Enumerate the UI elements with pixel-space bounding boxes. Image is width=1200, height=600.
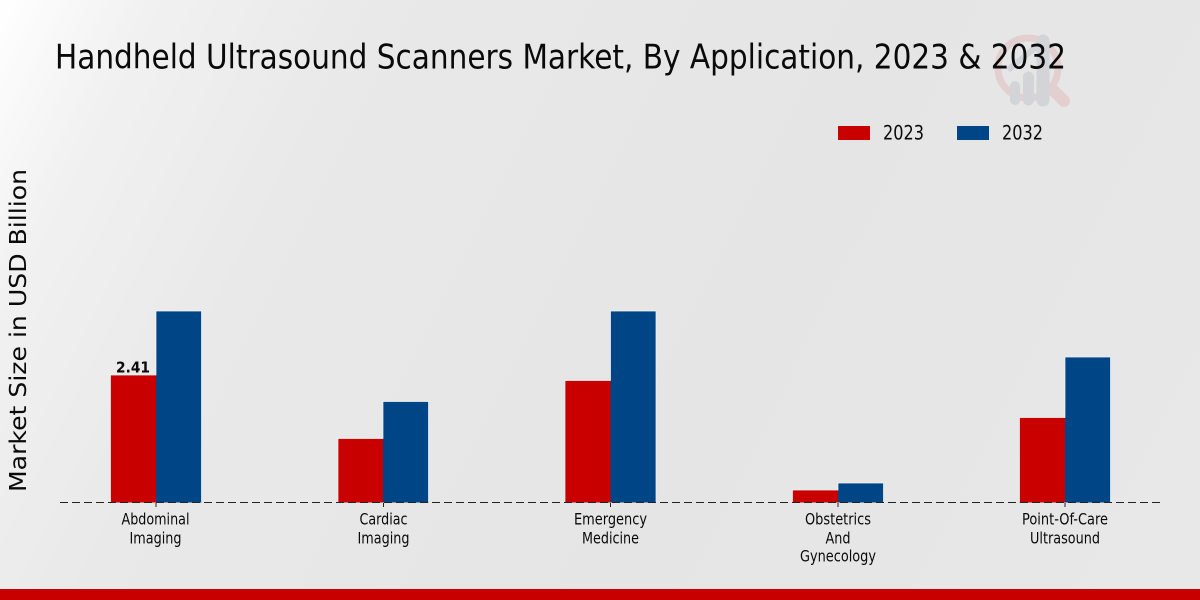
- legend item: 2032: 2032: [1002, 122, 1043, 144]
- label: Obstetrics And Gynecology: Gynecology: [800, 546, 876, 566]
- x axis labels: [122, 510, 1108, 566]
- label: Emergency Medicine: [574, 510, 647, 548]
- group: Emergency Medicine: [565, 311, 656, 502]
- group: Abdominal Imaging: [110, 311, 202, 502]
- title: Handheld Ultrasound Scanners Market, By Application, 2023 & 2032: [55, 38, 1066, 78]
- group: Point-Of-Care Ultrasound: [1020, 357, 1110, 502]
- legend item: 2023: [838, 122, 924, 144]
- label: Point-Of-Care Ultrasound: [1022, 510, 1108, 548]
- footer bar: [0, 589, 1200, 600]
- group: Cardiac Imaging: [338, 402, 428, 502]
- label: Cardiac Imaging: Cardiac: [360, 510, 408, 528]
- label: Point-Of-Care Ultrasound: Point-Of-Care: [1022, 510, 1108, 528]
- label: Abdominal Imaging: Imaging: [130, 528, 182, 548]
- label: Emergency Medicine: Medicine: [582, 528, 639, 548]
- legend item: 2023: 2023: [883, 122, 924, 144]
- legend item: 2032: [957, 122, 1043, 144]
- label: Obstetrics And Gynecology: Obstetrics: [805, 510, 871, 528]
- x axis: [60, 502, 1160, 507]
- y axis label: Market Size in USD Billion: [4, 169, 32, 492]
- label: Cardiac Imaging: Imaging: [358, 528, 410, 548]
- label: Point-Of-Care Ultrasound: Ultrasound: [1030, 528, 1100, 548]
- label: Cardiac Imaging: [358, 510, 410, 548]
- value label: 2.41: 2.41: [116, 358, 150, 376]
- label: Abdominal Imaging: Abdominal: [122, 510, 190, 528]
- icon: watermark logo: [998, 38, 1064, 101]
- legend: [838, 122, 1043, 144]
- label: Abdominal Imaging: [122, 510, 190, 548]
- label: Obstetrics And Gynecology: [800, 510, 876, 566]
- bar chart: [110, 311, 1110, 502]
- group: Obstetrics And Gynecology: [792, 483, 884, 502]
- label: Emergency Medicine: Emergency: [574, 510, 647, 528]
- label: Obstetrics And Gynecology: And: [826, 528, 850, 548]
